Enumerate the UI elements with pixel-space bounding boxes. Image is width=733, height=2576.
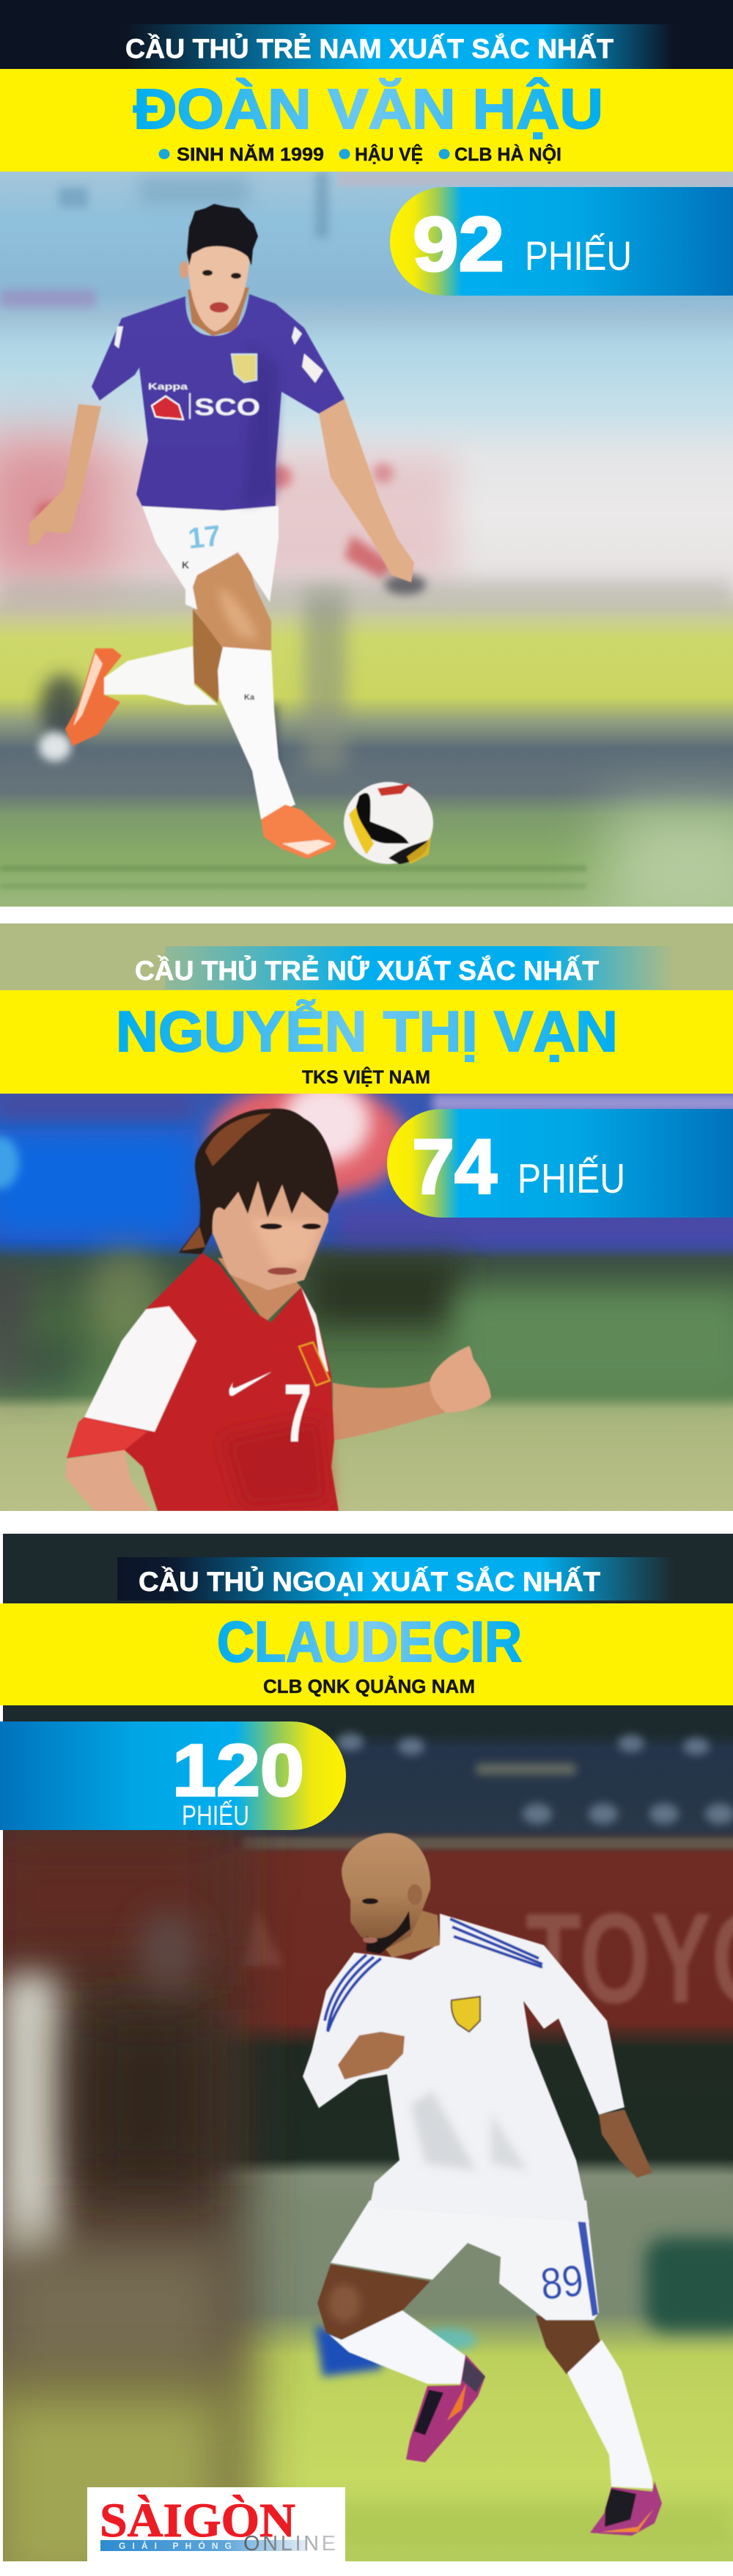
- jersey: [92, 294, 345, 511]
- shorts: [142, 506, 279, 610]
- yellow name banner: [0, 1603, 733, 1705]
- front knee: [536, 2316, 603, 2374]
- hair and face: [180, 261, 188, 279]
- title band: [165, 946, 674, 989]
- white sleeve: [84, 1306, 196, 1432]
- fist: [430, 1346, 491, 1413]
- header bar: [3, 1534, 733, 1603]
- photo: Nguyen Thi Van: [0, 1082, 733, 1511]
- swoosh: [229, 1372, 272, 1396]
- title band: [117, 1557, 674, 1600]
- vote badge: 92 votes: [390, 187, 733, 296]
- face: [212, 1166, 328, 1290]
- photo: Claudecir: [0, 1705, 733, 2576]
- front boot: [261, 805, 336, 859]
- football: [344, 782, 433, 864]
- blurred stadium background: [0, 172, 733, 924]
- head: [342, 1833, 430, 1953]
- back leg skin: [193, 609, 224, 703]
- flag badge: [299, 1342, 330, 1386]
- player figure: K: [182, 559, 189, 571]
- shoulder stripes: [325, 1919, 542, 2032]
- player details: TKS VIỆT NAM: [302, 1066, 430, 1088]
- yellow name banner: [0, 990, 733, 1094]
- player details: CLB HÀ NỘI: [454, 143, 561, 165]
- header bar: [0, 0, 733, 69]
- player name: NGUYỄN THỊ VẠN: [116, 999, 618, 1064]
- shorts number: 89: [538, 2255, 586, 2309]
- white collar trim: [301, 1287, 328, 1372]
- player details: CLB QNK QUẢNG NAM: [263, 1675, 475, 1697]
- neck: [188, 288, 249, 336]
- jersey logos: Kappa: [148, 381, 188, 392]
- hair: [179, 1108, 339, 1254]
- title: CẦU THỦ TRẺ NAM XUẤT SẮC NHẤT: [125, 33, 614, 64]
- logo: Sai Gon Giai Phong Online: GIẢI PHÓNG: [119, 2540, 232, 2551]
- player name: ĐOÀN VĂN HẬU: [133, 77, 603, 141]
- vote badge: 74 votes: PHIẾU: [517, 1155, 625, 1202]
- player details: HẬU VỆ: [355, 143, 423, 165]
- player figure: [303, 1833, 662, 2536]
- photo: Doan Van Hau running with ball: [0, 172, 733, 924]
- jersey logos: [114, 326, 323, 420]
- lower left arm: [65, 1450, 152, 1511]
- vote badge: 120 votes: PHIẾU: [182, 1799, 249, 1832]
- vote badge: 120 votes: [0, 1721, 346, 1832]
- jersey number: 7: [284, 1367, 312, 1459]
- title band: [125, 24, 674, 69]
- back boot: [65, 648, 122, 746]
- front thigh: [193, 553, 271, 651]
- logo: Sai Gon Giai Phong Online: ONLINE: [243, 2532, 336, 2555]
- shorts: [331, 2200, 599, 2320]
- front sock: [218, 647, 295, 819]
- vote badge: 74 votes: [387, 1109, 733, 1218]
- player figure: [65, 1108, 491, 1511]
- vote badge: 120 votes: 120: [172, 1730, 304, 1812]
- title: CẦU THỦ NGOẠI XUẤT SẮC NHẤT: [139, 1566, 600, 1597]
- player figure: [29, 204, 414, 859]
- title: CẦU THỦ TRẺ NỮ XUẤT SẮC NHẤT: [135, 955, 599, 986]
- neck: [218, 1258, 301, 1322]
- logo: Sai Gon Giai Phong Online: [87, 2487, 345, 2561]
- jersey: [303, 1914, 625, 2222]
- back thigh: [317, 2264, 430, 2340]
- blurred stadium background: [0, 1705, 733, 2576]
- hands: [338, 2032, 405, 2079]
- back boot: [406, 2354, 485, 2462]
- player details: SINH NĂM 1999: [177, 144, 324, 165]
- blurred field background: [0, 1082, 733, 1511]
- neck: [381, 1907, 440, 1958]
- red cuff: [67, 1417, 147, 1458]
- player figure: Ka: [244, 693, 255, 702]
- yellow name banner: [0, 69, 733, 172]
- jersey logos: SCO: [194, 394, 260, 420]
- player figure: 17: [186, 520, 222, 555]
- player name: CLAUDECIR: [217, 1609, 522, 1674]
- vote badge: 92 votes: PHIẾU: [525, 233, 632, 279]
- back sock: [104, 646, 218, 705]
- club crest: [452, 1997, 480, 2032]
- header bar: [0, 923, 733, 990]
- vote badge: 74 votes: 74: [412, 1124, 497, 1210]
- front sock: [567, 2340, 652, 2489]
- right arm: [333, 1381, 445, 1441]
- back sock: [329, 2310, 467, 2384]
- panel: best foreign player: [0, 1534, 733, 2576]
- jersey torso: [67, 1253, 339, 1511]
- player details: [158, 143, 561, 165]
- logo: Sai Gon Giai Phong Online: SÀIGÒN: [100, 2494, 295, 2547]
- panel: best young female player: [0, 923, 733, 1511]
- vote badge: 92 votes: 92: [413, 202, 504, 288]
- left arm: [29, 404, 101, 546]
- panel: best young male player: [0, 0, 733, 924]
- front boot: [590, 2481, 662, 2536]
- right arm: [319, 399, 414, 582]
